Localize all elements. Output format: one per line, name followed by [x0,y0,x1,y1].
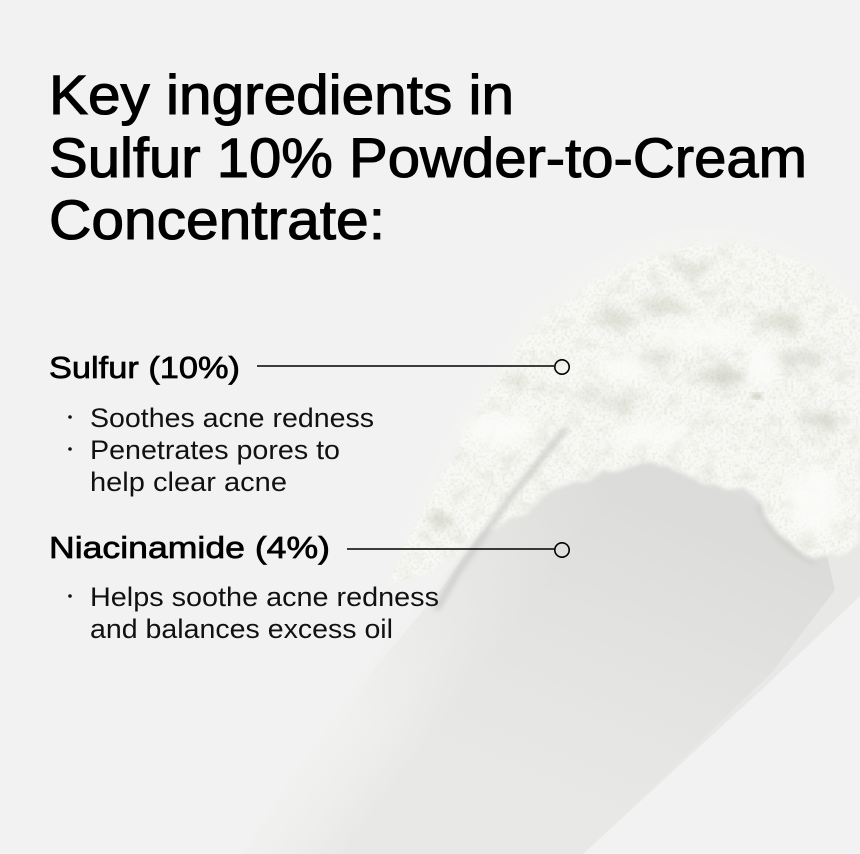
sulfur bullets: Penetrates pores to [90,435,340,465]
powder highlights [466,325,841,534]
powder dark spot [751,393,763,399]
powder shadow patches [428,265,842,527]
sulfur bullets [68,403,374,497]
cream swatch [240,420,860,854]
sulfur bullets: help clear acne [90,467,287,497]
cream fold shadow [436,428,566,610]
sulfur bullets: Soothes acne redness [90,403,374,433]
niacinamide leader line [347,543,569,557]
title: Sulfur 10% Powder-to-Cream [49,126,807,189]
shadow under powder [758,505,815,562]
title: Concentrate: [49,188,385,251]
ingredient: niacinamide [49,530,569,644]
ingredient: sulfur [49,350,569,497]
niacinamide bullets: Helps soothe acne redness [90,582,439,612]
title [49,63,807,251]
niacinamide bullets: and balances excess oil [90,614,393,644]
sulfur heading: Sulfur (10%) [49,350,240,385]
title: Key ingredients in [49,63,514,126]
powder pile [392,236,860,610]
powder glow [400,236,860,570]
niacinamide heading: Niacinamide (4%) [49,530,330,565]
niacinamide bullets [68,582,439,644]
sulfur leader line [257,360,569,374]
